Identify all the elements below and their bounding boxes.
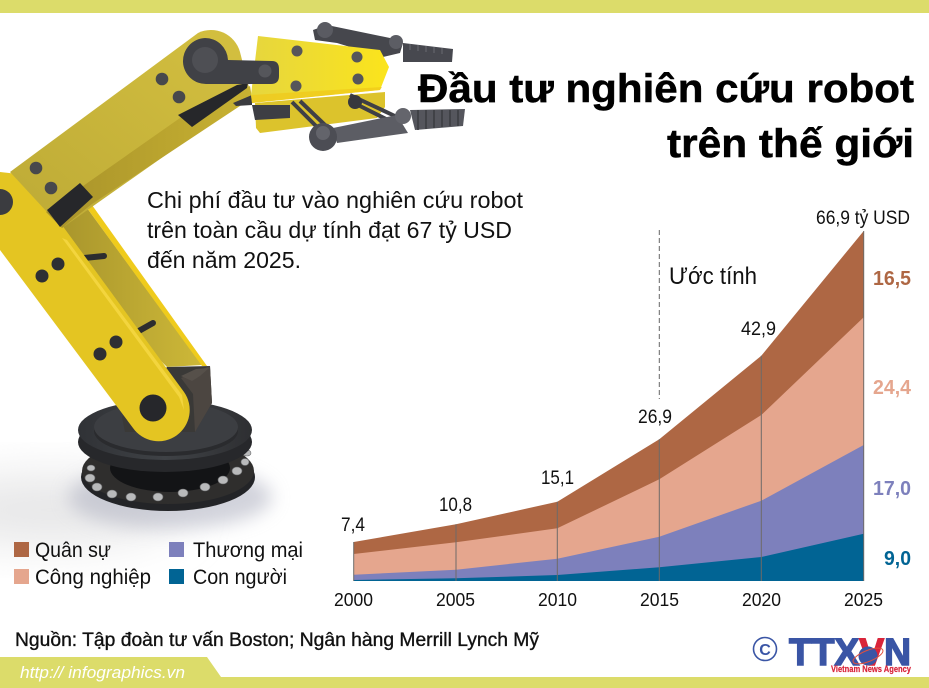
upper gripper plate xyxy=(251,36,389,103)
area: con người xyxy=(354,534,864,581)
intro text: đến năm 2025. xyxy=(147,247,301,273)
lower arm back face xyxy=(58,208,202,367)
total labels: 7,4 xyxy=(341,515,365,536)
base xyxy=(78,400,255,511)
logo: TTXVN: C xyxy=(759,642,771,659)
lower gripper plate xyxy=(255,92,385,133)
total labels xyxy=(341,208,910,536)
total labels: 26,9 xyxy=(638,407,672,428)
year axis: 2005 xyxy=(436,589,475,610)
top band xyxy=(0,0,929,13)
source: Nguồn: Tập đoàn tư vấn Boston; Ngân hàng Merrill Lynch Mỹ xyxy=(15,630,539,651)
segment values 2025: 24,4 xyxy=(873,377,912,399)
legend xyxy=(14,539,303,589)
intro text: trên toàn cầu dự tính đạt 67 tỷ USD xyxy=(147,217,512,243)
segment values 2025: 17,0 xyxy=(873,478,911,500)
upper arm xyxy=(0,30,252,228)
legend: Thương mại xyxy=(193,539,303,562)
total labels: 10,8 xyxy=(439,495,472,516)
segment values 2025: 16,5 xyxy=(873,268,911,290)
total labels: 66,9 tỷ USD xyxy=(816,208,910,229)
title: Đầu tư nghiên cứu robot xyxy=(418,67,914,111)
legend: Con người xyxy=(193,566,287,589)
title xyxy=(418,67,914,166)
year axis: 2000 xyxy=(334,589,373,610)
lower arm front face xyxy=(0,172,190,441)
gripper jaws xyxy=(252,22,465,151)
intro text xyxy=(147,187,524,273)
year axis: 2025 xyxy=(844,589,883,610)
total labels: 15,1 xyxy=(541,468,574,489)
year axis: 2010 xyxy=(538,589,577,610)
total labels: 42,9 xyxy=(741,319,776,340)
shoulder linkage xyxy=(183,38,279,84)
legend: Quân sự xyxy=(35,539,111,562)
legend: Công nghiệp xyxy=(35,566,151,589)
area: công nghiệp xyxy=(354,317,864,581)
year axis xyxy=(334,589,883,610)
area: thương mại xyxy=(354,445,864,581)
title: trên thế giới xyxy=(667,122,914,166)
segment values 2025 xyxy=(873,268,912,570)
logo: TTXVN: Vietnam News Agency xyxy=(831,664,911,674)
footer band: http:// infographics.vn xyxy=(20,663,185,682)
area: quân sự xyxy=(354,231,864,581)
logo: TTXVN: TTXVN xyxy=(789,632,911,674)
segment values 2025: 9,0 xyxy=(884,548,911,570)
year axis: 2015 xyxy=(640,589,679,610)
year axis: 2020 xyxy=(742,589,781,610)
estimate marker: Ước tính xyxy=(669,263,757,290)
floor shadow xyxy=(0,465,272,544)
stacked area chart xyxy=(334,208,912,610)
illustration: robot arm xyxy=(0,22,465,544)
pegs xyxy=(84,256,153,332)
intro text: Chi phí đầu tư vào nghiên cứu robot xyxy=(147,187,524,213)
mount block xyxy=(122,366,212,432)
footer band xyxy=(0,657,929,688)
